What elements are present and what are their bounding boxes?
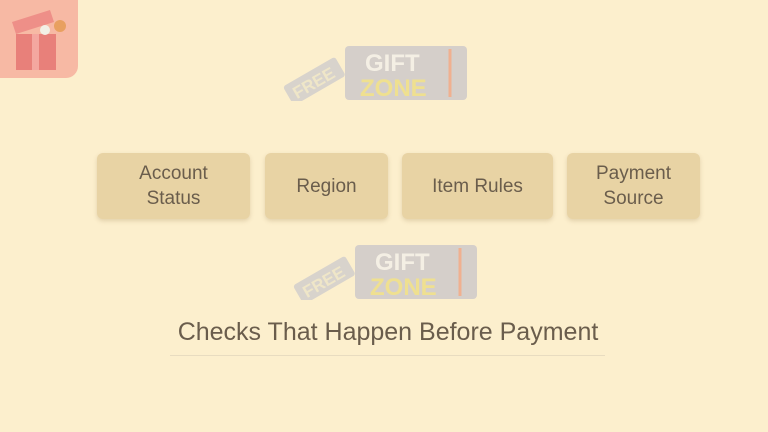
box: account status: Account <box>139 163 208 184</box>
title: Checks That Happen Before Payment <box>178 318 598 346</box>
logo: gift zone top <box>284 46 467 101</box>
box: payment source <box>567 153 700 219</box>
box: payment source: Payment <box>596 163 671 184</box>
icon: gift app <box>0 0 78 78</box>
logo: gift zone bottom: GIFT <box>375 249 430 276</box>
logo: gift zone top: GIFT <box>365 50 420 77</box>
box: item rules <box>402 153 553 219</box>
box: account status <box>97 153 250 219</box>
box: payment source: Source <box>603 188 664 209</box>
box: region <box>265 153 388 219</box>
box: account status: Status <box>147 188 200 209</box>
box: item rules: Item Rules <box>432 176 523 196</box>
box: region: Region <box>296 176 357 196</box>
logo: gift zone bottom <box>294 245 477 300</box>
